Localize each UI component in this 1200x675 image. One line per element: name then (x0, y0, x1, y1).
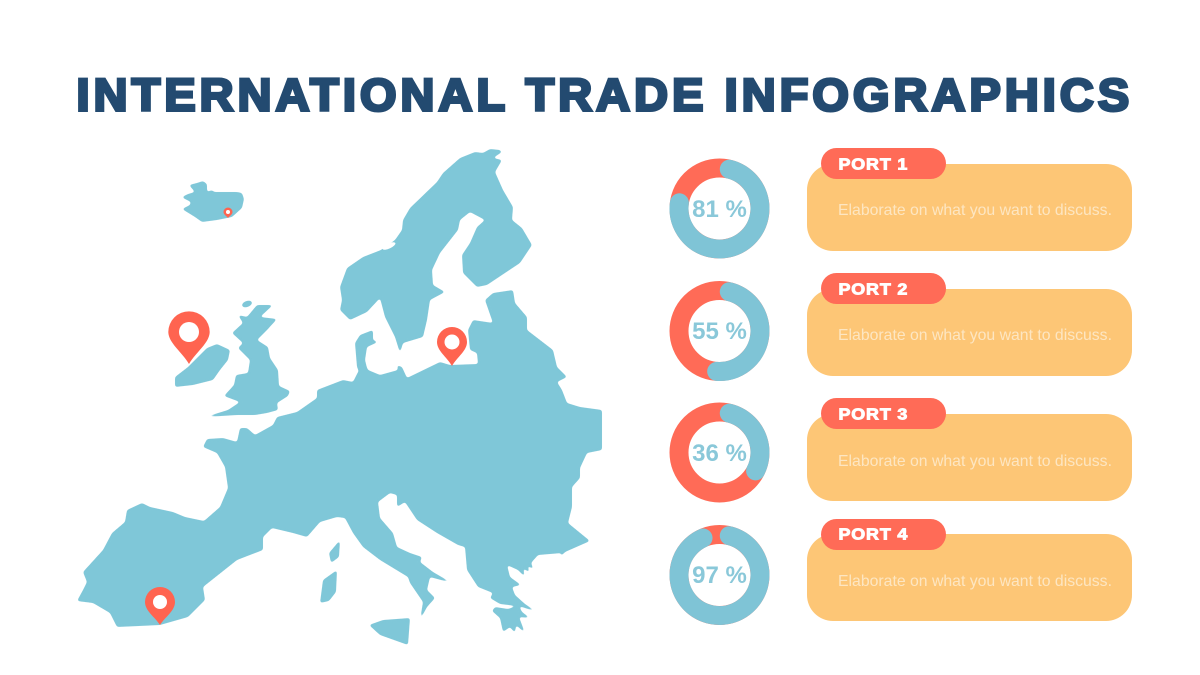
Scottish island (241, 299, 253, 309)
card: port 1 (807, 148, 1132, 251)
title: INTERNATIONAL TRADE INFOGRAPHICS (76, 69, 1129, 121)
card: port 2: Elaborate on what you want to discuss. (838, 327, 1112, 344)
card: port 1: Elaborate on what you want to discuss. (838, 202, 1112, 219)
card: port 3: Elaborate on what you want to discuss. (838, 453, 1112, 470)
pin: southern Spain (145, 587, 175, 625)
donut: 81 percent (670, 159, 769, 258)
Iceland (182, 181, 244, 222)
Ireland (175, 344, 230, 387)
mainland Europe (77, 290, 602, 633)
card: port 3: PORT 3 (838, 406, 907, 423)
card: port 4 (807, 519, 1132, 621)
card: port 3 (807, 398, 1132, 501)
Sicily (369, 618, 410, 645)
Great Britain (205, 305, 290, 417)
Scandinavia (340, 149, 532, 353)
donut: 55 percent: 55 % (692, 318, 747, 345)
card: port 2: PORT 2 (838, 281, 907, 298)
donut: 55 percent (670, 282, 769, 380)
card: port 2 (807, 273, 1132, 376)
card: port 4: Elaborate on what you want to discuss. (838, 573, 1112, 590)
Corsica (329, 540, 340, 563)
map of Europe (77, 149, 602, 645)
Denmark (355, 330, 378, 374)
donut: 97 percent (670, 526, 769, 624)
donut: 36 percent: 36 % (692, 440, 747, 467)
Norwegian inlet (382, 241, 396, 251)
donut: 36 percent (670, 403, 769, 502)
donut: 81 percent: 81 % (692, 196, 747, 223)
Sardinia (320, 570, 337, 603)
pin: Iceland (224, 208, 232, 218)
card: port 4: PORT 4 (838, 526, 908, 543)
donut: 97 percent: 97 % (692, 562, 747, 589)
pin: Baltic coast (437, 327, 467, 366)
pin: Ireland (168, 311, 210, 364)
card: port 1: PORT 1 (838, 156, 907, 173)
